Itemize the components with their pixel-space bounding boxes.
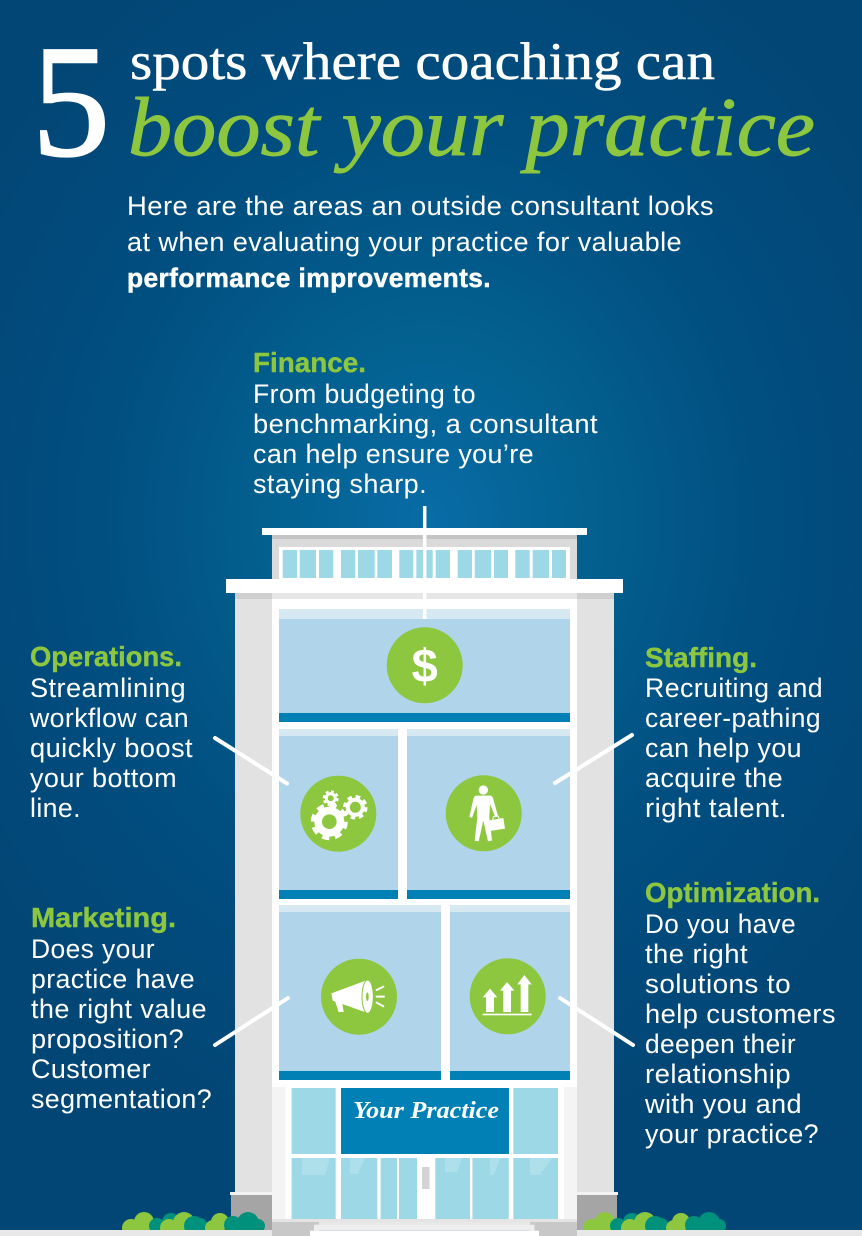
bushes left [122,1212,265,1230]
text block: staffing: career-pathing [645,703,821,733]
text block: staffing: Recruiting and [645,673,823,703]
door panel [422,1167,430,1189]
ground floor [272,1087,577,1220]
text block: staffing: right talent. [645,793,787,823]
penthouse [272,535,577,579]
text block: marketing: Customer [31,1054,151,1084]
text block: finance [253,347,598,499]
leader line: staffing [555,735,632,783]
practice sign: Your Practice [353,1098,499,1124]
text block: operations: quickly boost [30,733,193,763]
text block: marketing: proposition? [31,1024,184,1054]
bushes right [583,1212,726,1230]
leader line: operations [215,738,287,784]
text block: operations: Streamlining [30,673,186,703]
text block: operations: Operations. [30,641,182,672]
text block: optimization [644,877,836,1149]
text block: staffing: can help you [645,733,802,763]
window: operations [279,729,398,899]
text block: finance: benchmarking, a consultant [253,409,598,439]
text block: staffing [645,642,823,823]
icon: rising arrows [470,958,546,1034]
top roof [262,528,587,535]
window: marketing [279,905,441,1080]
text block: marketing: practice have [31,964,195,994]
building face [272,593,577,1220]
text block: finance: staying sharp. [253,469,427,499]
icon: dollar: $ [412,639,438,692]
numeral 5: 5 [32,12,110,190]
leader line: optimization [560,998,633,1045]
text block: finance: Finance. [253,347,366,378]
leader line: marketing [215,998,288,1045]
text block: operations: workflow can [29,703,189,733]
text block: optimization: help customers [645,999,836,1029]
text block: marketing: Does your [31,934,155,964]
intro text: performance improvements. [127,263,491,293]
text block: optimization: deepen their [645,1029,796,1059]
text block: optimization: your practice? [645,1119,819,1149]
intro text: at when evaluating your practice for valuable [127,227,682,257]
text block: staffing: acquire the [645,763,783,793]
window: staffing [407,729,570,899]
practice sign [341,1088,509,1154]
text block: optimization: the right [645,939,748,969]
ground and steps [0,1219,862,1236]
icon: gears [300,776,376,852]
main roof [226,579,623,593]
title line: boost your practice: boost your practice [128,81,815,174]
text block: finance: From budgeting to [253,379,476,409]
icon: megaphone [321,959,397,1035]
leader line: finance [423,506,426,619]
building [0,528,862,1236]
text block: finance: can help ensure you’re [253,439,534,469]
text block: optimization: Optimization. [645,877,820,908]
text block: marketing: Marketing. [31,902,176,933]
text block: staffing: Staffing. [645,642,757,673]
text block: optimization: relationship [645,1059,791,1089]
title [32,12,815,190]
text block: optimization: Do you have [645,909,796,939]
text block: optimization: solutions to [645,969,791,999]
text block: operations [29,641,193,823]
text block: marketing: the right value [31,994,207,1024]
intro text: Here are the areas an outside consultant looks [127,191,714,221]
text block: marketing: segmentation? [31,1084,212,1114]
columns [235,593,614,1192]
icon: person with briefcase [446,775,522,851]
window: finance floor [279,609,570,722]
icon: dollar [387,627,463,703]
window: optimization [450,905,570,1080]
title line: spots where coaching can: spots where coaching can [130,33,715,91]
column bases [230,1192,618,1230]
intro text [127,191,714,293]
text block: operations: line. [30,793,81,823]
text block: optimization: with you and [644,1089,802,1119]
text block: operations: your bottom [30,763,177,793]
text block: marketing [31,902,212,1114]
